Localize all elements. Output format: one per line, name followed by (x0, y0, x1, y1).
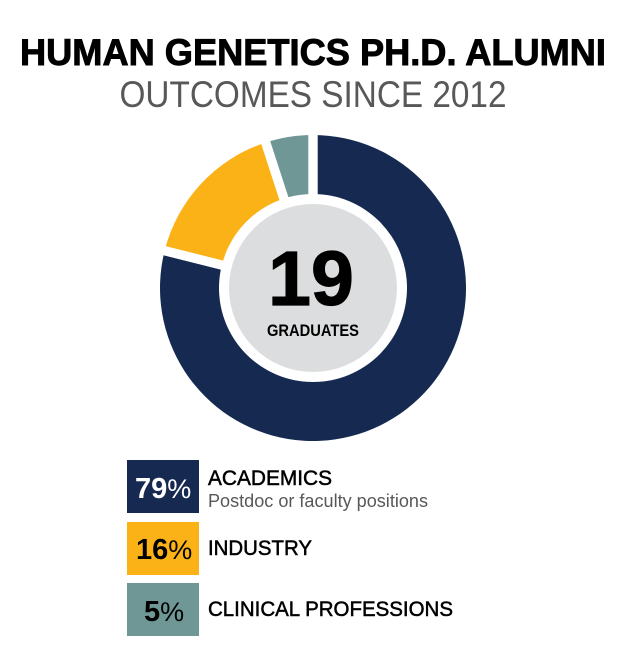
segment: clinical professions 5% (266, 135, 313, 288)
segment: industry 16% (165, 142, 313, 288)
label: CLINICAL PROFESSIONS (208, 598, 453, 621)
center label: GRADUATES (267, 321, 359, 340)
label: ACADEMICS (208, 467, 332, 490)
legend: academics (127, 460, 428, 513)
legend: clinical professions (127, 583, 453, 636)
swatch (127, 522, 199, 575)
label: INDUSTRY (208, 537, 312, 560)
subtitle: OUTCOMES SINCE 2012 (120, 74, 506, 115)
segment gaps (155, 125, 313, 288)
swatch (127, 583, 199, 636)
value: 5% (144, 596, 184, 628)
legend: industry (127, 522, 312, 575)
value: 16% (136, 534, 192, 566)
segment: academics 79% (160, 135, 466, 441)
swatch (127, 460, 199, 513)
title: HUMAN GENETICS PH.D. ALUMNI (20, 32, 606, 73)
value: 79% (135, 473, 191, 505)
donut chart (155, 125, 466, 441)
inner white ring (219, 194, 407, 382)
center circle (229, 204, 397, 372)
description: Postdoc or faculty positions (208, 491, 428, 511)
center number: 19 (268, 236, 354, 322)
